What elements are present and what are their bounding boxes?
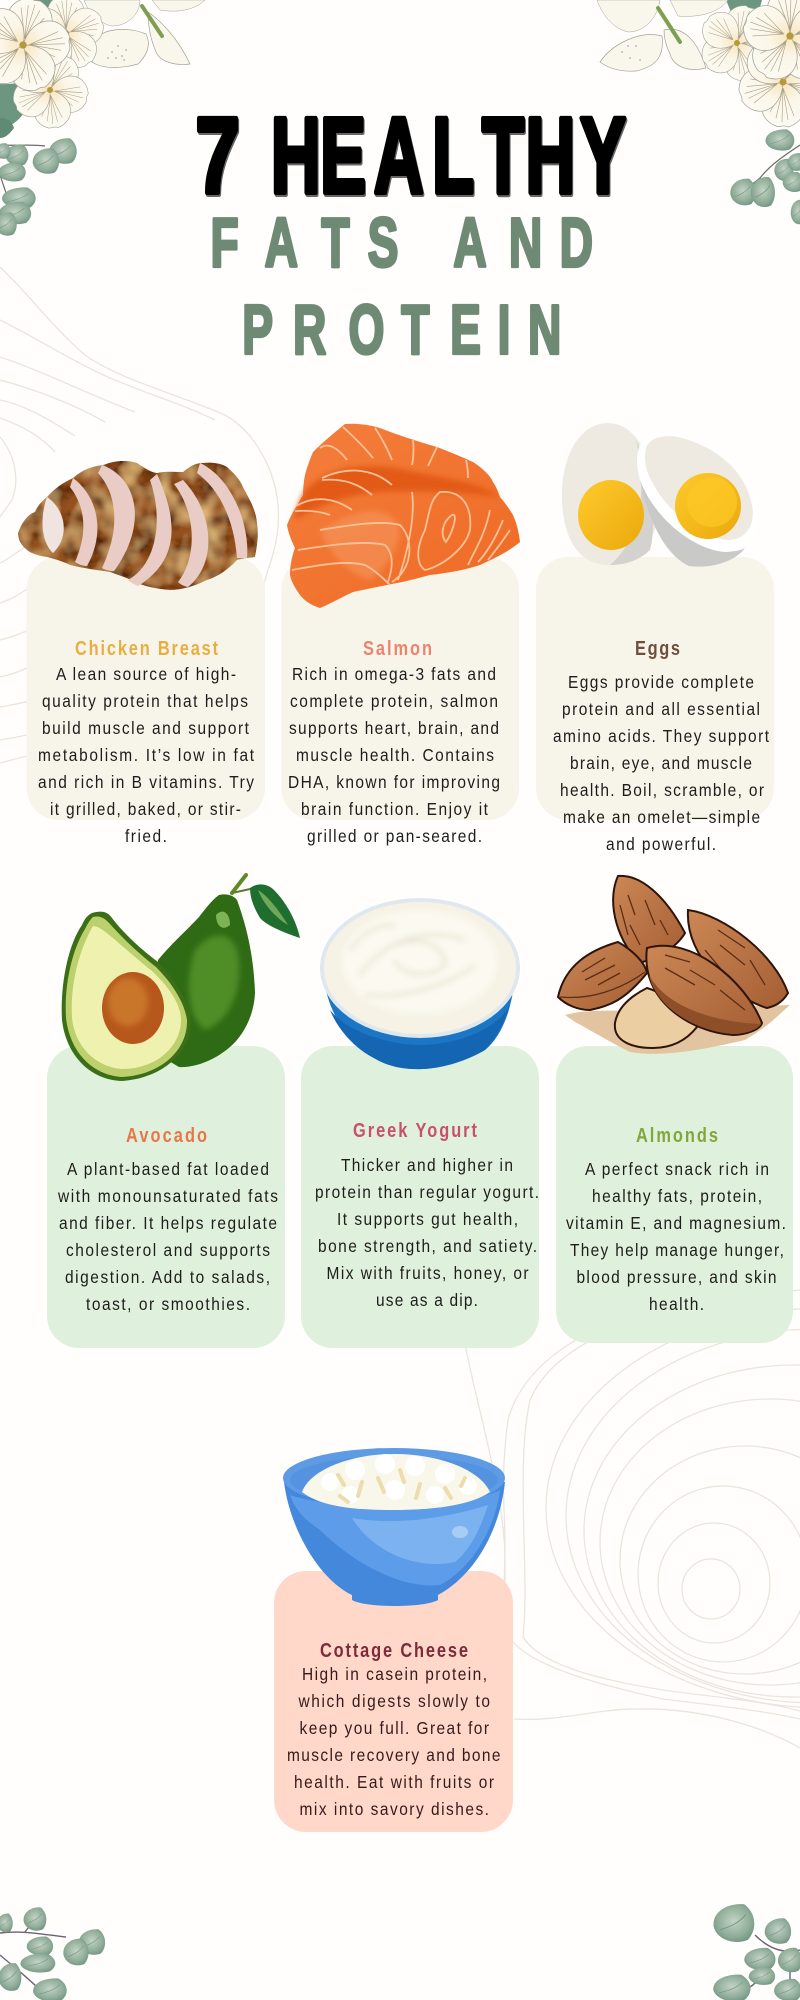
panel: chicken breast xyxy=(26,557,265,846)
body text: A lean source of high- xyxy=(56,664,236,684)
title line 2: FATS AND xyxy=(211,203,593,282)
body text: supports heart, brain, and xyxy=(289,718,499,738)
title line 1: HEALTHY xyxy=(271,96,626,216)
heading: Cottage Cheese xyxy=(320,1638,468,1661)
icon: avocado xyxy=(62,875,300,1081)
lily petals xyxy=(90,29,148,68)
almond: pale xyxy=(615,988,697,1048)
body text: mix into savory dishes. xyxy=(300,1799,489,1819)
body text: make an omelet—simple xyxy=(563,807,760,827)
body text: amino acids. They support xyxy=(553,726,769,746)
body text: Eggs provide complete xyxy=(568,672,754,692)
icon: salmon xyxy=(287,424,520,608)
eucalyptus: bottom left xyxy=(0,1907,105,2000)
body text xyxy=(315,1155,539,1310)
green leaves behind flowers xyxy=(726,0,800,24)
body text: use as a dip. xyxy=(376,1290,478,1310)
blossoms xyxy=(683,0,790,97)
panel: eggs xyxy=(536,557,774,854)
body text: which digests slowly to xyxy=(298,1691,490,1711)
lily petals xyxy=(600,35,662,71)
avocado pit xyxy=(102,972,164,1044)
stem xyxy=(232,875,246,893)
body text: keep you full. Great for xyxy=(300,1718,489,1738)
body text: bone strength, and satiety. xyxy=(318,1236,537,1256)
panel: greek yogurt xyxy=(301,1046,539,1348)
body text: protein and all essential xyxy=(562,699,760,719)
almond: front xyxy=(646,946,762,1035)
highlight xyxy=(452,1526,468,1538)
panel: cottage cheese xyxy=(274,1571,513,1832)
blossoms xyxy=(24,0,108,75)
cream swirl xyxy=(350,925,475,996)
fat lines xyxy=(292,427,510,585)
body text: protein than regular yogurt. xyxy=(315,1182,539,1202)
upper fillet shading xyxy=(295,466,500,520)
heading: Chicken Breast xyxy=(75,636,218,659)
body text: digestion. Add to salads, xyxy=(65,1267,270,1287)
body text: it grilled, baked, or stir- xyxy=(50,799,241,819)
icon: cottage cheese bowl xyxy=(283,1448,505,1606)
almond: back top xyxy=(613,876,685,963)
body text: and rich in B vitamins. Try xyxy=(38,772,255,792)
body text: muscle recovery and bone xyxy=(287,1745,501,1765)
icon: almonds xyxy=(558,876,790,1054)
cream xyxy=(324,902,516,1034)
body text xyxy=(38,664,255,846)
body text: health. xyxy=(649,1294,704,1314)
body text: quality protein that helps xyxy=(42,691,248,711)
body text: health. Boil, scramble, or xyxy=(560,780,764,800)
body text: A plant-based fat loaded xyxy=(67,1159,269,1179)
body text: with monounsaturated fats xyxy=(57,1186,278,1206)
icon: chicken breast xyxy=(18,461,258,590)
eucalyptus: bottom right xyxy=(713,1904,800,2000)
body text xyxy=(553,672,769,854)
eucalyptus xyxy=(745,145,800,190)
front yolk xyxy=(675,473,741,539)
body text: fried. xyxy=(125,826,167,846)
rim xyxy=(283,1448,505,1508)
heading: Greek Yogurt xyxy=(353,1118,477,1141)
halved avocado xyxy=(62,912,191,1081)
body text: complete protein, salmon xyxy=(290,691,498,711)
body text: brain function. Enjoy it xyxy=(301,799,488,819)
heading: Salmon xyxy=(363,636,432,659)
pink slices xyxy=(42,497,64,553)
body text xyxy=(288,664,500,846)
body text: Mix with fruits, honey, or xyxy=(327,1263,529,1283)
body text: muscle health. Contains xyxy=(296,745,494,765)
panel: almonds xyxy=(556,1046,793,1343)
body text: blood pressure, and skin xyxy=(576,1267,776,1287)
contour lines: top left xyxy=(0,267,278,763)
body text xyxy=(566,1159,786,1314)
body text: vitamin E, and magnesium. xyxy=(566,1213,786,1233)
icon: eggs xyxy=(562,423,757,567)
back avocado xyxy=(150,894,255,1067)
heading: Eggs xyxy=(635,636,680,659)
body text: DHA, known for improving xyxy=(288,772,500,792)
body text: brain, eye, and muscle xyxy=(570,753,752,773)
title line 1: 7 xyxy=(195,96,240,216)
green leaves behind flowers xyxy=(0,0,56,130)
body text xyxy=(57,1159,278,1314)
body text: High in casein protein, xyxy=(302,1664,487,1684)
cheese curds xyxy=(302,1454,490,1510)
body text: Thicker and higher in xyxy=(341,1155,513,1175)
icon: greek yogurt xyxy=(320,898,520,1069)
body text xyxy=(287,1664,501,1819)
body text: cholesterol and supports xyxy=(66,1240,270,1260)
body text: build muscle and support xyxy=(42,718,249,738)
front egg xyxy=(640,480,745,567)
body text: Rich in omega-3 fats and xyxy=(292,664,496,684)
stain xyxy=(565,1005,790,1054)
body text: healthy fats, protein, xyxy=(592,1186,762,1206)
body text: health. Eat with fruits or xyxy=(294,1772,494,1792)
almond: left xyxy=(558,942,647,1010)
back egg xyxy=(562,423,658,565)
back yolk xyxy=(578,480,644,550)
body text: toast, or smoothies. xyxy=(86,1294,250,1314)
leaf xyxy=(250,884,300,938)
title xyxy=(195,96,626,369)
body text: grilled or pan-seared. xyxy=(307,826,482,846)
body text: and fiber. It helps regulate xyxy=(59,1213,277,1233)
rim xyxy=(320,898,520,1038)
bowl body xyxy=(284,1482,505,1606)
title line 3: PROTEIN xyxy=(242,290,561,369)
blue bowl xyxy=(325,985,514,1069)
flowers: top left corner xyxy=(0,0,205,236)
panel: salmon xyxy=(282,557,519,846)
heading: Almonds xyxy=(636,1123,718,1146)
body text: and powerful. xyxy=(606,834,716,854)
almond: right xyxy=(688,910,788,1008)
body text: They help manage hunger, xyxy=(570,1240,784,1260)
panel: avocado xyxy=(47,1046,285,1348)
body text: A perfect snack rich in xyxy=(585,1159,769,1179)
body text: metabolism. It’s low in fat xyxy=(38,745,254,765)
flowers: top right corner xyxy=(597,0,800,224)
heading: Avocado xyxy=(126,1123,207,1146)
body text: It supports gut health, xyxy=(337,1209,518,1229)
contour lines: bottom right xyxy=(462,1290,800,1748)
eucalyptus xyxy=(0,145,45,205)
